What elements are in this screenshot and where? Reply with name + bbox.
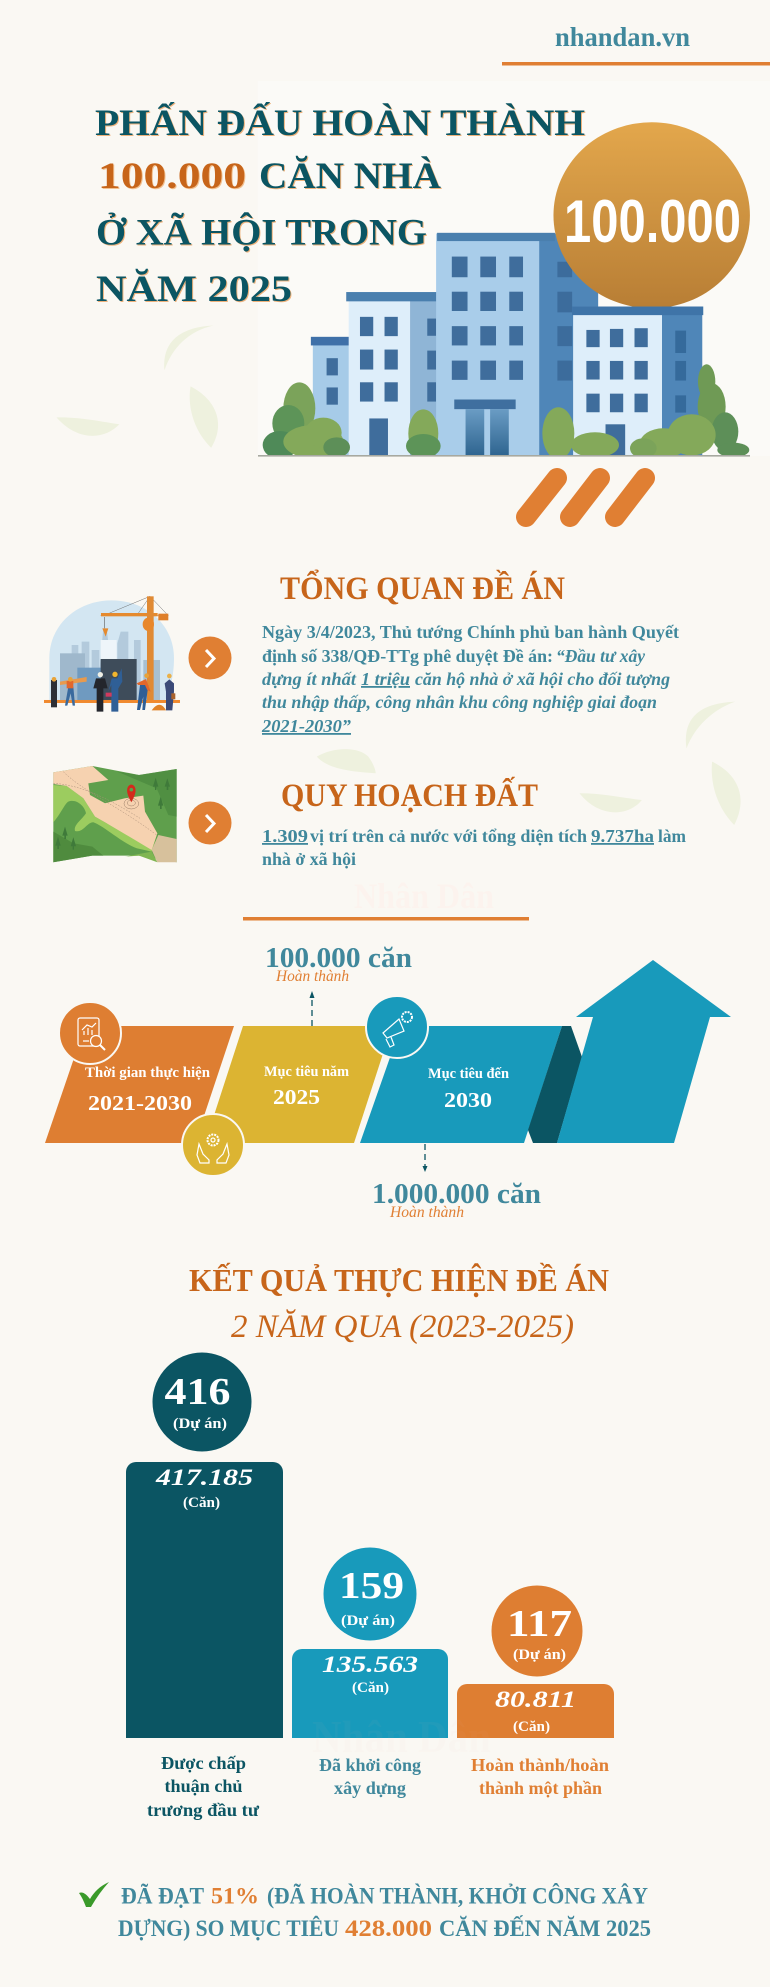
overview paragraph: “Đầu tư xây (556, 646, 646, 666)
land paragraph: nhà ở xã hội (262, 849, 356, 869)
bar: started: Đã khởi công (319, 1755, 421, 1775)
block 3: 2030 target: Mục tiêu đến (428, 1066, 510, 1082)
land paragraph: 9.737ha (591, 826, 654, 846)
results heading: KẾT QUẢ THỰC HIỆN ĐỀ ÁN (189, 1262, 609, 1298)
conclusion statement (118, 1882, 651, 1941)
block 2: 2025 target (182, 1064, 349, 1176)
block 1: implementation period (59, 1002, 211, 1115)
block 2: 2025 target: Mục tiêu năm (264, 1064, 349, 1080)
bar: completed: (Dự án) (513, 1647, 566, 1663)
conclusion statement: DỰNG) SO MỤC TIÊU (118, 1915, 339, 1941)
timeline arrow: parallelogram blocks (45, 960, 731, 1143)
illustration: apartment buildings with 100.000 badge (255, 81, 770, 470)
title (95, 101, 585, 310)
land paragraph: làm (658, 826, 686, 846)
land paragraph: vị trí trên cả nước với tổng diện tích (310, 826, 587, 846)
bar: started: (Căn) (352, 1680, 389, 1696)
header rule (502, 62, 770, 66)
bar: approved: (Căn) (183, 1495, 220, 1511)
watermark: Nhân Dân (354, 876, 494, 916)
title: NĂM 2025 (96, 268, 292, 310)
bar: approved: thuận chủ (164, 1776, 243, 1796)
overview paragraph: định số 338/QĐ-TTg phê duyệt Đề án: (262, 646, 553, 666)
chevron button 2 (188, 802, 232, 844)
bar: completed: 80.811 (495, 1687, 576, 1712)
bar: completed (457, 1586, 614, 1798)
target 2025 callout: 100.000 căn (265, 943, 412, 974)
overview paragraph (261, 622, 679, 736)
results heading (189, 1262, 609, 1345)
title: Ở XÃ HỘI TRONG (96, 210, 427, 254)
conclusion statement: CĂN ĐẾN NĂM 2025 (439, 1915, 651, 1941)
bar: approved: trương đầu tư (147, 1800, 260, 1820)
background leaves top (56, 325, 218, 448)
title: CĂN NHÀ (259, 155, 441, 197)
bar: started: (Dự án) (341, 1613, 395, 1629)
block 2: 2025 target: 2025 (273, 1085, 320, 1109)
target 2025 callout: Hoàn thành (275, 968, 349, 985)
bar: started: xây dựng (334, 1778, 406, 1798)
heading: overview: TỔNG QUAN ĐỀ ÁN (280, 568, 565, 607)
bar: started: 135.563 (322, 1652, 418, 1677)
land paragraph (262, 826, 686, 869)
bar: approved: Được chấp (161, 1753, 246, 1773)
target 2030 callout: Hoàn thành (389, 1204, 464, 1221)
site name: nhandan.vn (555, 22, 690, 52)
watermark over bars: Nhân Dân (312, 1711, 491, 1762)
chevron button 1 (188, 636, 232, 680)
bar: approved: (Dự án) (173, 1416, 227, 1432)
icon: check mark (79, 1882, 109, 1907)
land paragraph: 1.309 (262, 826, 308, 846)
bar: completed: thành một phần (479, 1778, 602, 1798)
conclusion statement: (ĐÃ HOÀN THÀNH, KHỞI CÔNG XÂY (267, 1882, 648, 1908)
background leaves middle (317, 702, 741, 825)
block 3: 2030 target (366, 996, 510, 1112)
bar: approved: 417.185 (155, 1465, 253, 1490)
overview paragraph: căn hộ nhà ở xã hội cho đối tượng (415, 669, 670, 689)
block 3: 2030 target: 2030 (444, 1088, 492, 1112)
results heading: 2 NĂM QUA (2023-2025) (231, 1308, 574, 1345)
conclusion statement: 51% (211, 1884, 259, 1908)
bar: started: 159 (339, 1565, 404, 1607)
decorative slashes (526, 478, 645, 517)
overview paragraph: dựng ít nhất (262, 669, 357, 689)
block 1: implementation period: Thời gian thực hiện (85, 1065, 211, 1081)
title: PHẤN ĐẤU HOÀN THÀNH (95, 101, 585, 144)
overview paragraph: 1 triệu (361, 669, 410, 689)
bar: completed: 117 (507, 1603, 572, 1645)
overview paragraph: 2021-2030” (261, 716, 351, 736)
bar: completed: Hoàn thành/hoàn (471, 1755, 609, 1775)
target 2030 callout (372, 1144, 541, 1221)
overview paragraph: Ngày 3/4/2023, Thủ tướng Chính phủ ban hành Quyết (262, 622, 679, 642)
target 2030 callout: 1.000.000 căn (372, 1179, 541, 1210)
bar: approved: 416 (164, 1371, 230, 1413)
target 2025 callout (265, 943, 412, 1026)
conclusion statement: ĐÃ ĐẠT (121, 1884, 204, 1908)
illustration: construction site (44, 596, 180, 712)
bar: approved (126, 1352, 283, 1820)
heading: land planning: QUY HOẠCH ĐẤT (281, 775, 538, 814)
block 1: implementation period: 2021-2030 (88, 1091, 192, 1115)
bar: completed: (Căn) (513, 1719, 550, 1735)
illustration: land map (53, 766, 177, 862)
bar: started (292, 1548, 448, 1798)
title: 100.000 (98, 156, 246, 197)
conclusion statement: 428.000 (345, 1916, 432, 1941)
section rule (243, 917, 529, 920)
overview paragraph: thu nhập thấp, công nhân khu công nghiệp giai đoạn (262, 692, 657, 712)
